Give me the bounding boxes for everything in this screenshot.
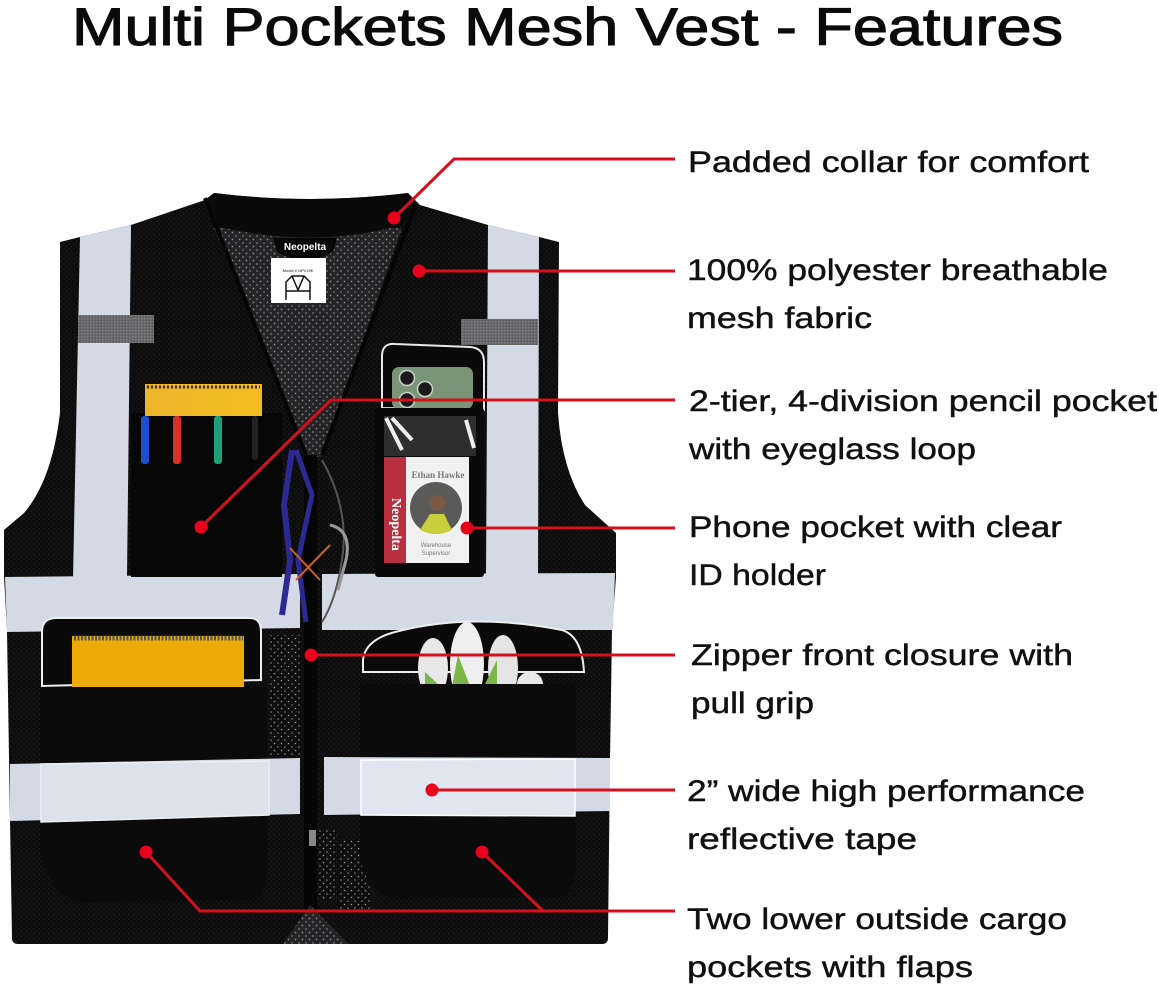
clear ID holder: Ethan Hawke <box>412 470 464 480</box>
callout: pencil pocket: with eyeglass loop <box>688 433 976 466</box>
central zipper <box>304 455 317 944</box>
phone pocket <box>382 344 484 410</box>
clear ID holder: Neopelta <box>388 498 403 551</box>
neck tag: Model # NPV19K <box>283 268 314 273</box>
zipper pull <box>309 830 316 846</box>
mesh vents between pockets <box>268 635 370 910</box>
vest illustration <box>4 193 616 944</box>
callout: cargo pockets <box>140 846 1067 984</box>
callout: zipper <box>304 639 1073 720</box>
left cargo flap pocket <box>41 687 267 902</box>
right vertical reflective tape <box>486 225 539 578</box>
callout: cargo pockets: Two lower outside cargo <box>687 903 1067 936</box>
callout: zipper: pull grip <box>691 687 814 720</box>
neck tag <box>271 238 337 303</box>
callout: phone pocket: ID holder <box>689 559 826 592</box>
left chest pencil pocket <box>131 384 282 577</box>
callout: mesh fabric: 100% polyester breathable <box>687 254 1108 287</box>
callout: zipper: Zipper front closure with <box>691 639 1073 672</box>
zipper edges <box>205 198 416 455</box>
callout: cargo pockets: pockets with flaps <box>687 951 973 984</box>
callout: reflective tape: reflective tape <box>687 823 917 856</box>
horizontal waist reflective tape <box>5 573 615 632</box>
callout: padded collar <box>388 146 1090 224</box>
callout: reflective tape <box>426 775 1085 856</box>
callout: phone pocket: Phone pocket with clear <box>689 511 1062 544</box>
right cargo flap pocket <box>361 684 575 899</box>
safety glasses <box>282 450 347 622</box>
clear ID holder: Supervisor <box>422 551 450 557</box>
callout: mesh fabric <box>412 254 1108 335</box>
callout: pencil pocket <box>194 385 1158 534</box>
inner back mesh panel <box>214 228 402 457</box>
lower mesh vent <box>283 905 348 944</box>
padded collar <box>205 193 416 238</box>
left grey strap <box>78 315 154 343</box>
callout: pencil pocket: 2-tier, 4-division pencil pocket <box>689 385 1158 418</box>
neck tag: Neopelta <box>284 242 327 253</box>
gloves <box>418 622 543 706</box>
lower reflective tape <box>10 757 610 822</box>
callout: phone pocket <box>460 511 1062 592</box>
callout: mesh fabric: mesh fabric <box>687 302 872 335</box>
callout: reflective tape: 2” wide high performance <box>687 775 1085 808</box>
clear ID holder <box>375 408 484 577</box>
callout: padded collar: Padded collar for comfort <box>688 146 1090 179</box>
left vertical reflective tape <box>73 225 131 578</box>
right grey strap <box>461 319 538 345</box>
clear ID holder: Warehouse <box>421 543 452 549</box>
left upper cargo pocket opening <box>42 618 261 687</box>
vest body <box>4 193 616 944</box>
right upper cargo pocket opening <box>363 621 584 706</box>
